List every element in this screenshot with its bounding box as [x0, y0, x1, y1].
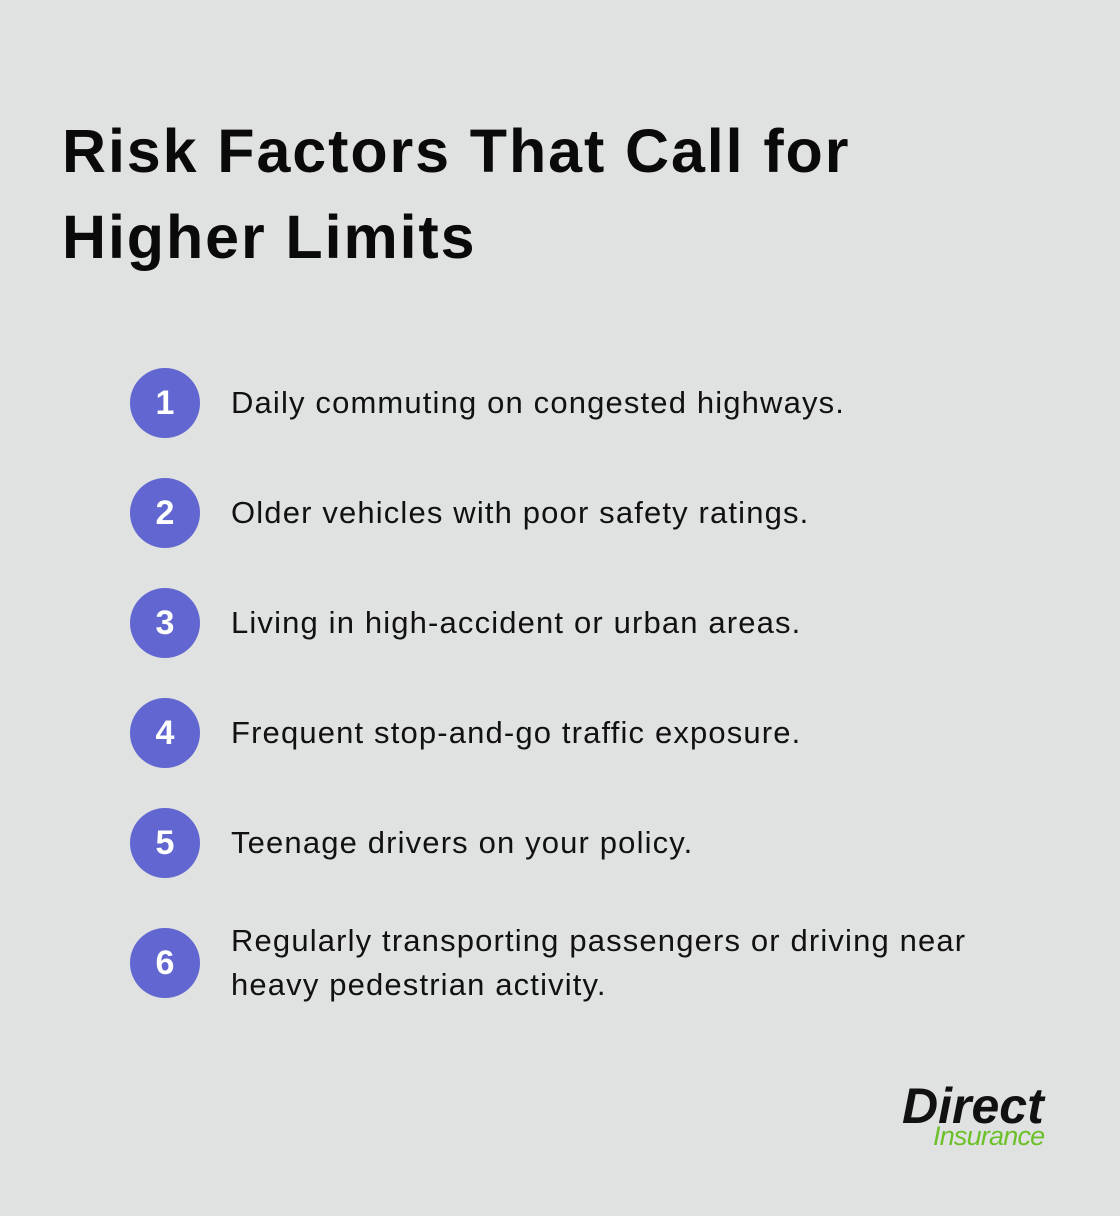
item 5	[130, 808, 693, 878]
item 2	[130, 478, 809, 548]
item 3: Living in high-accident or urban areas.	[231, 605, 801, 640]
item 1	[130, 368, 845, 438]
title: Higher Limits	[62, 203, 476, 271]
item 6: Regularly transporting passengers or driving near heavy pedestrian activity.	[231, 923, 966, 1002]
item 1: Daily commuting on congested highways.	[231, 385, 845, 420]
logo: Insurance	[933, 1121, 1044, 1151]
item 5: Teenage drivers on your policy.	[231, 825, 693, 860]
item 4: Frequent stop-and-go traffic exposure.	[231, 715, 801, 750]
item 4: 4	[156, 714, 174, 752]
item 2: 2	[156, 494, 174, 532]
item 6: 6	[156, 944, 174, 982]
item 5: 5	[156, 824, 174, 862]
item 4	[130, 698, 801, 768]
item 2: Older vehicles with poor safety ratings.	[231, 495, 809, 530]
item 3	[130, 588, 801, 658]
title	[62, 117, 850, 271]
item 3: 3	[156, 604, 174, 642]
logo: Direct	[902, 1078, 1044, 1134]
item 1: 1	[156, 384, 174, 422]
title: Risk Factors That Call for	[62, 117, 850, 185]
